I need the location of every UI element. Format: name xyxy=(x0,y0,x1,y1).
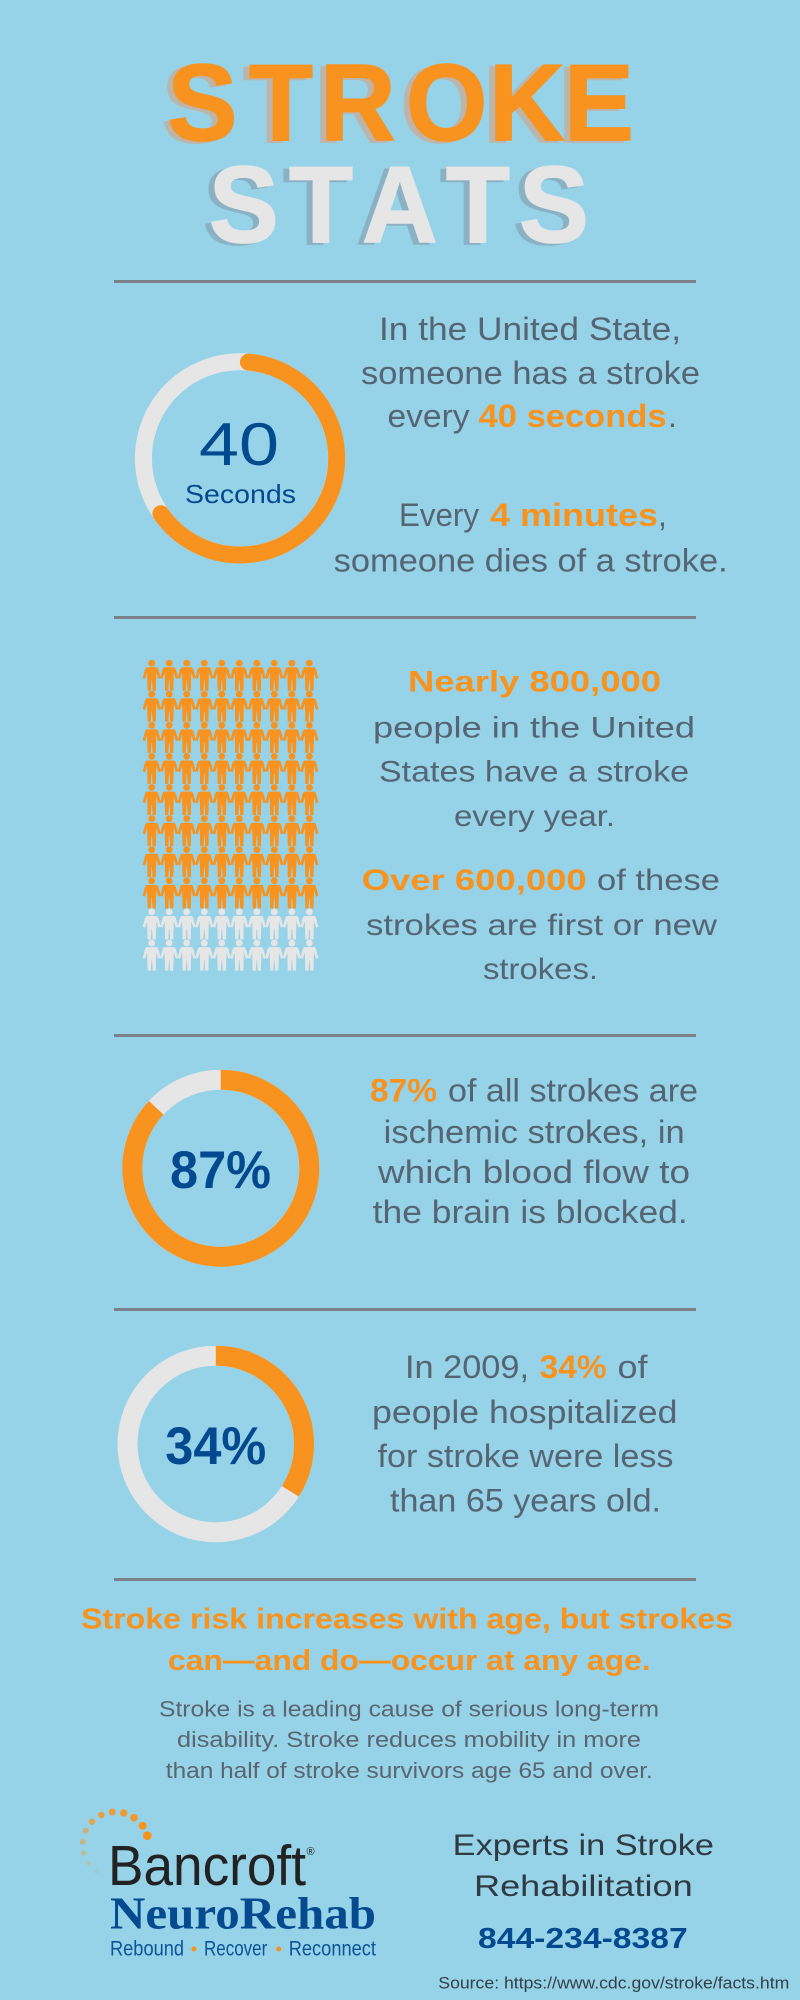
heading: stroke risk: can—and do—occur at any age. xyxy=(168,1645,651,1677)
source: Source: https://www.cdc.gov/stroke/facts.htm xyxy=(438,1974,789,1992)
heading: STATS: STATS xyxy=(209,143,589,265)
text block: experts: Experts in Stroke xyxy=(453,1829,714,1862)
text block: stroke frequency: 4 minutes xyxy=(490,497,658,533)
text block: stroke frequency: , xyxy=(658,497,667,533)
text block: hospitalized under 65: people hospitalized xyxy=(372,1394,678,1430)
text block: hospitalized under 65: of xyxy=(618,1349,648,1385)
text block: stroke frequency: In the United State, xyxy=(379,311,681,347)
text block: yearly counts: strokes are first or new xyxy=(366,909,717,942)
text block: disability: disability. Stroke reduces mobility in more xyxy=(177,1727,641,1752)
phone number: 844-234-8387 xyxy=(478,1923,688,1955)
text block: ischemic strokes: ischemic strokes, in xyxy=(384,1114,685,1150)
text block: hospitalized under 65: than 65 years old. xyxy=(390,1483,661,1519)
tagline: Recover xyxy=(204,1938,267,1961)
panel: 87 percent ischemic xyxy=(132,1073,698,1257)
text block: stroke frequency: 40 seconds xyxy=(479,398,667,434)
tagline: Reconnect xyxy=(289,1938,376,1961)
text block: disability: Stroke is a leading cause of serious long-term xyxy=(159,1697,659,1722)
text block: stroke frequency: . xyxy=(668,398,677,434)
text block: yearly counts xyxy=(362,666,720,986)
donut chart: 34% xyxy=(128,1356,304,1532)
text block: stroke frequency xyxy=(334,311,728,579)
panel: risk statement xyxy=(81,1603,733,1783)
logo: Bancroft NeuroRehab xyxy=(80,1808,376,1961)
text block: stroke frequency: Every xyxy=(399,497,479,533)
title xyxy=(162,41,634,267)
heading: stroke risk xyxy=(81,1603,733,1677)
text block: disability xyxy=(159,1697,659,1783)
text block: yearly counts: Over 600,000 xyxy=(362,864,587,897)
text block: ischemic strokes: the brain is blocked. xyxy=(373,1194,688,1230)
text block: ischemic strokes: which blood flow to xyxy=(377,1154,690,1190)
registered mark: ® xyxy=(306,1846,315,1858)
text block: disability: than half of stroke survivors age 65 and over. xyxy=(166,1758,653,1783)
text block: hospitalized under 65: In 2009, xyxy=(405,1349,529,1385)
donut chart: 87%: 87% xyxy=(170,1141,271,1200)
donut chart: 34%: 34% xyxy=(165,1417,266,1476)
tagline xyxy=(110,1938,376,1961)
text block: stroke frequency: every xyxy=(388,398,470,434)
text block: stroke frequency: someone has a stroke xyxy=(361,355,700,391)
heading: STROKE: STROKE xyxy=(168,41,634,163)
wordmark: NeuroRehab: NeuroRehab xyxy=(110,1887,376,1938)
pictogram: people grid xyxy=(143,660,318,971)
text block: stroke frequency: someone dies of a stroke. xyxy=(334,543,728,579)
panel: 34 percent under 65 xyxy=(128,1349,678,1532)
wordmark: Bancroft: Bancroft xyxy=(108,1834,306,1898)
text block: yearly counts: people in the United xyxy=(373,711,695,744)
donut chart: 40 seconds xyxy=(143,362,337,555)
text block: yearly counts: States have a stroke xyxy=(379,756,689,789)
text block: yearly counts: strokes. xyxy=(483,953,598,986)
heading: stroke risk: Stroke risk increases with age, but strokes xyxy=(81,1603,733,1635)
text block: ischemic strokes: of all strokes are xyxy=(448,1073,698,1109)
text block: ischemic strokes xyxy=(370,1073,698,1230)
panel: contact xyxy=(438,1829,789,1992)
text block: experts: Rehabilitation xyxy=(474,1870,693,1903)
text block: hospitalized under 65 xyxy=(372,1349,678,1519)
text block: hospitalized under 65: for stroke were less xyxy=(378,1438,674,1474)
heading: STATS: STATS xyxy=(203,145,583,267)
text block: ischemic strokes: 87% xyxy=(370,1073,437,1109)
donut chart: 40 seconds: Seconds xyxy=(185,479,296,509)
tagline: Rebound xyxy=(110,1938,184,1961)
text block: experts xyxy=(453,1829,714,1903)
text block: yearly counts: of these xyxy=(597,864,720,897)
text block: hospitalized under 65: 34% xyxy=(540,1349,607,1385)
text block: yearly counts: every year. xyxy=(454,800,615,833)
icon: dotted arc xyxy=(80,1808,152,1874)
heading: STROKE: STROKE xyxy=(162,43,628,165)
donut chart: 87% xyxy=(132,1080,309,1257)
panel: 800,000 strokes per year xyxy=(143,660,720,986)
panel: every 40 seconds xyxy=(143,311,728,579)
text block: yearly counts: Nearly 800,000 xyxy=(408,666,661,699)
donut chart: 40 seconds: 40 xyxy=(199,411,279,478)
